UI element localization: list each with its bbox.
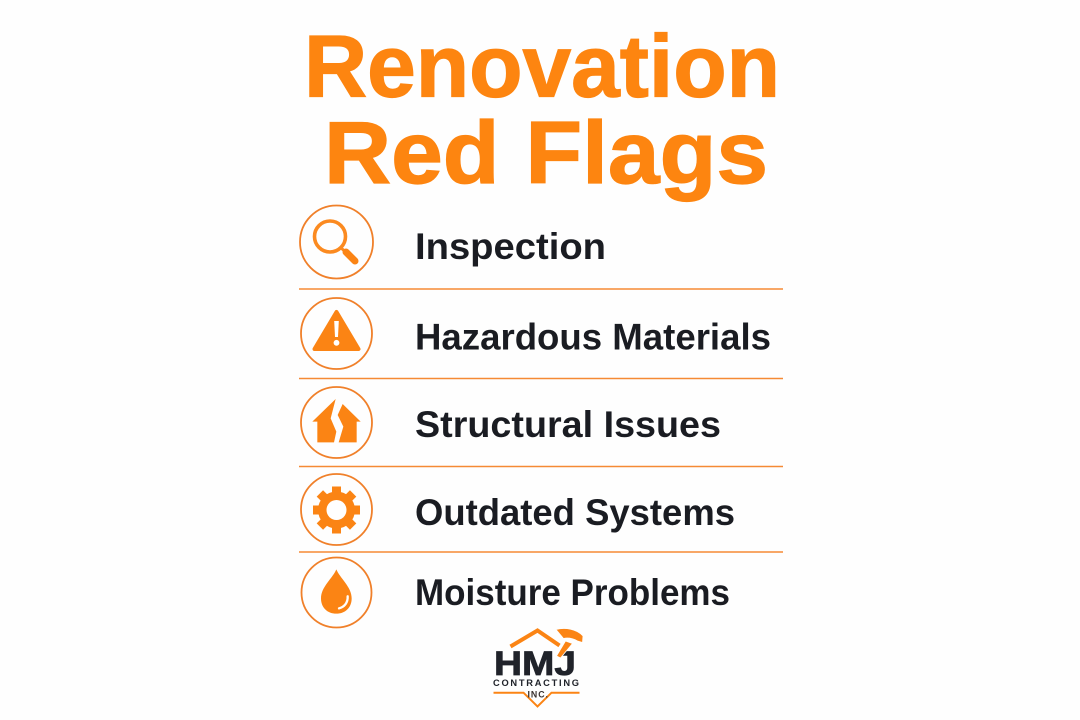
logo roof	[510, 630, 560, 646]
row: Structural Issues	[301, 387, 721, 458]
row: Moisture Problems	[302, 558, 730, 628]
logo bottom chevron	[494, 693, 580, 706]
row: Hazardous Materials	[301, 298, 771, 369]
icon: water drop	[302, 558, 372, 628]
title	[304, 16, 780, 202]
icon: gear	[301, 474, 372, 545]
icon: warning triangle	[301, 298, 372, 369]
label: Hazardous Materials	[415, 316, 771, 357]
title: Renovation	[304, 16, 780, 116]
title: Red Flags	[324, 103, 768, 202]
label: Inspection	[415, 226, 606, 267]
row: Inspection	[300, 206, 606, 278]
logo subtitle: CONTRACTING	[493, 678, 579, 688]
label: Moisture Problems	[415, 572, 730, 613]
label: Structural Issues	[415, 404, 721, 445]
logo: HMJ Contracting	[493, 628, 583, 706]
row: Outdated Systems	[301, 474, 735, 545]
logo wordmark: HMJ	[494, 645, 576, 683]
icon: cracked house	[301, 387, 372, 458]
label: Outdated Systems	[415, 492, 735, 533]
logo INC: INC.	[528, 689, 548, 699]
logo hammer	[556, 628, 583, 658]
icon: magnifying glass	[300, 206, 373, 278]
